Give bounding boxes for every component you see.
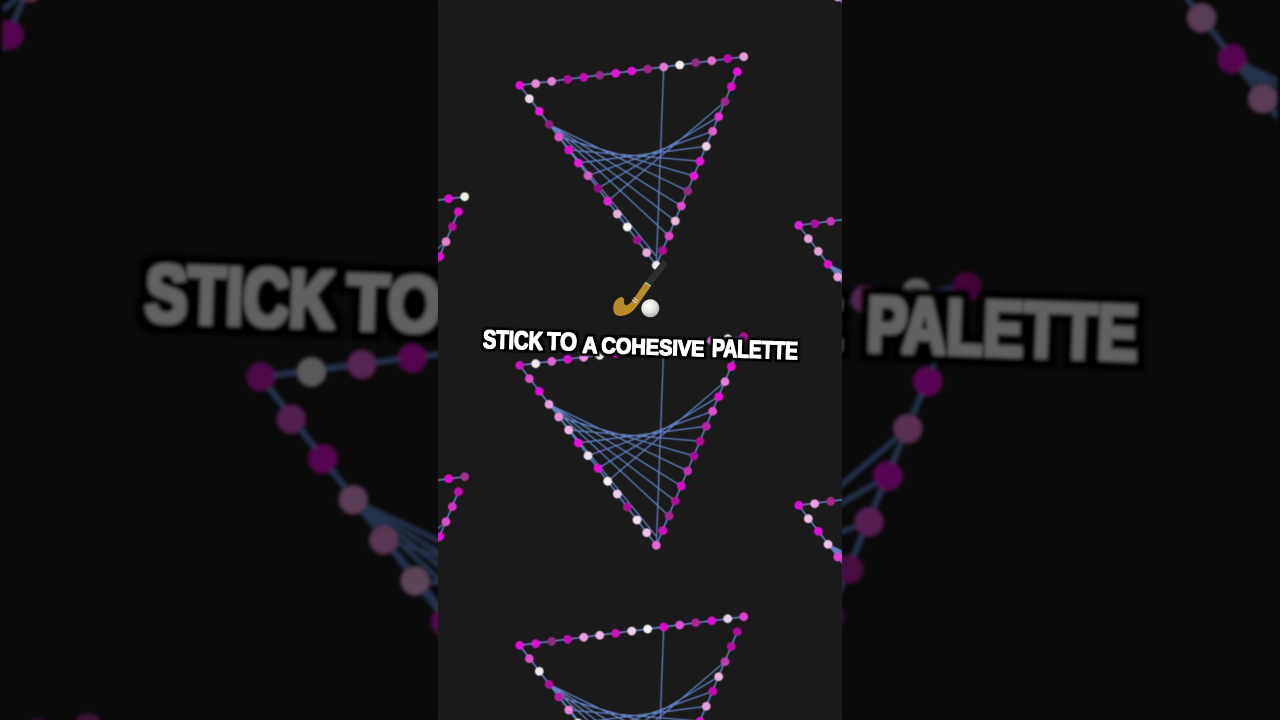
blurred enlarged background copy: PALETTE bbox=[865, 280, 1139, 377]
blurred enlarged background copy: A bbox=[457, 272, 508, 354]
caption bbox=[482, 324, 798, 365]
caption: TO bbox=[547, 327, 577, 357]
caption: COHESIVE bbox=[601, 333, 705, 361]
blurred enlarged background copy: STICK bbox=[144, 248, 336, 346]
icon: hockey stick and ball bbox=[613, 260, 668, 317]
blurred enlarged background copy: TO bbox=[346, 258, 443, 349]
blurred enlarged background copy: COHESIVE bbox=[517, 275, 844, 364]
string art triangles bbox=[438, 0, 842, 720]
centre panel bbox=[438, 0, 842, 720]
caption: STICK bbox=[482, 324, 544, 356]
caption: A bbox=[582, 332, 598, 358]
caption: PALETTE bbox=[712, 335, 798, 365]
